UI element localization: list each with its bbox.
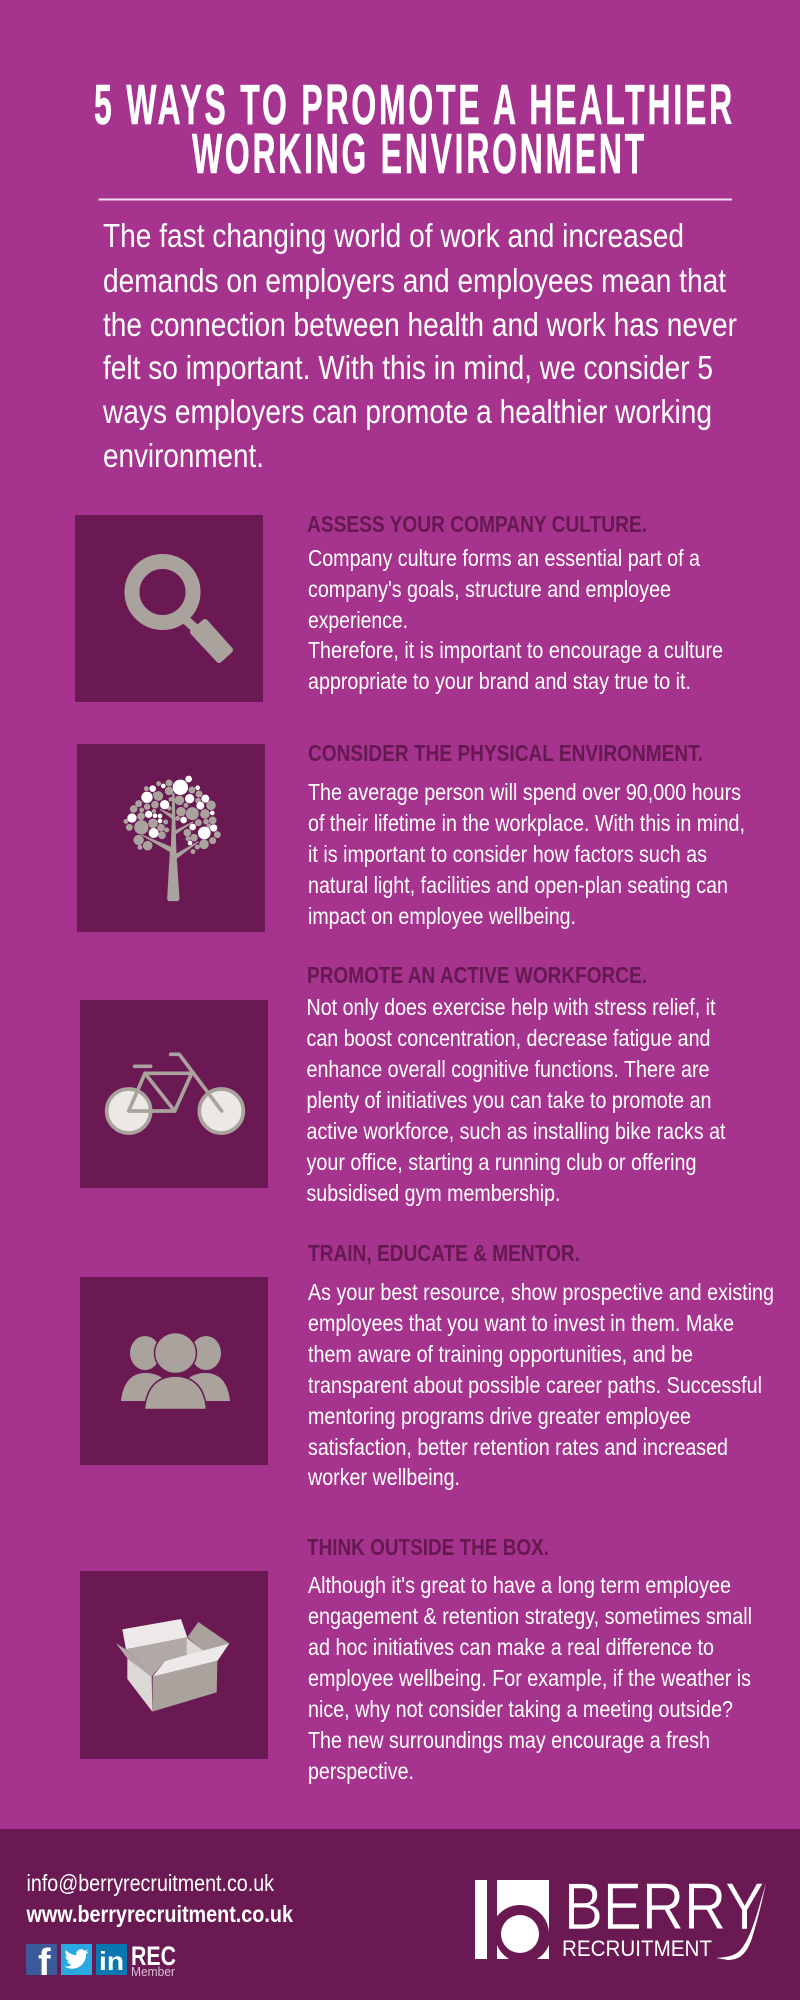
REC member badge: Member [131, 1964, 176, 1979]
body text: it is important to consider how factors such as [308, 841, 707, 867]
body text: enhance overall cognitive functions. There are [306, 1056, 710, 1082]
logo: Berry Recruitment: BERRY [564, 1869, 764, 1943]
body text [308, 545, 723, 694]
body text: perspective. [308, 1758, 414, 1784]
contact details: www.berryrecruitment.co.uk [26, 1901, 293, 1927]
logo: Berry Recruitment: RECRUITMENT [562, 1936, 712, 1961]
contact details [26, 1870, 293, 1927]
intro paragraph [102, 217, 737, 474]
body text: worker wellbeing. [307, 1464, 460, 1490]
body text: active workforce, such as installing bike racks at [306, 1118, 726, 1144]
heading: TRAIN, EDUCATE & MENTOR. [308, 1240, 580, 1266]
body text: them aware of training opportunities, and be [308, 1341, 693, 1367]
REC member badge [131, 1941, 176, 1979]
section 1: assess your company culture [75, 511, 723, 702]
intro paragraph: felt so important. With this in mind, we consider 5 [103, 349, 713, 386]
body text: nice, why not consider taking a meeting outside? [308, 1696, 733, 1722]
icon: linkedin: in [99, 1946, 124, 1976]
intro paragraph: The fast changing world of work and increased [103, 217, 684, 254]
icon panel: bicycle [80, 1000, 268, 1188]
body text: impact on employee wellbeing. [308, 903, 576, 929]
body text: satisfaction, better retention rates and increased [308, 1434, 728, 1460]
icon panel: magnifying glass [75, 515, 263, 702]
body text: Company culture forms an essential part of a [308, 545, 700, 571]
icon: facebook: f [38, 1942, 51, 1984]
body text [306, 994, 726, 1206]
body text [307, 1279, 774, 1490]
body text: employees that you want to invest in them. Make [308, 1310, 734, 1336]
body text [308, 1572, 752, 1784]
body text: Therefore, it is important to encourage a culture [308, 637, 723, 663]
heading: THINK OUTSIDE THE BOX. [307, 1534, 549, 1560]
body text: experience. [308, 607, 408, 633]
icon: twitter [61, 1944, 92, 1975]
body text: Not only does exercise help with stress relief, it [306, 994, 716, 1020]
section 3: promote an active workforce [80, 962, 726, 1206]
body text: subsidised gym membership. [306, 1180, 560, 1206]
body text: can boost concentration, decrease fatigue and [306, 1025, 710, 1051]
body text: appropriate to your brand and stay true to it. [308, 668, 691, 694]
body text: The new surroundings may encourage a fresh [308, 1727, 710, 1753]
icon panel: open box [80, 1571, 268, 1759]
intro paragraph: ways employers can promote a healthier working [102, 393, 712, 430]
body text: company's goals, structure and employee [308, 576, 671, 602]
icon: linkedin [96, 1944, 127, 1976]
section 4: train, educate and mentor [80, 1240, 774, 1490]
body text: mentoring programs drive greater employee [308, 1403, 691, 1429]
contact details: info@berryrecruitment.co.uk [26, 1870, 274, 1896]
heading: CONSIDER THE PHYSICAL ENVIRONMENT. [308, 740, 703, 766]
body text: natural light, facilities and open-plan seating can [308, 872, 728, 898]
footer band [0, 1829, 800, 2000]
heading: ASSESS YOUR COMPANY CULTURE. [307, 511, 647, 537]
body text: Although it's great to have a long term employee [308, 1572, 731, 1598]
heading: PROMOTE AN ACTIVE WORKFORCE. [307, 962, 647, 988]
body text: your office, starting a running club or offering [306, 1149, 696, 1175]
body text: ad hoc initiatives can make a real difference to [308, 1634, 714, 1660]
icon: facebook [26, 1942, 57, 1984]
icon panel: group of people [80, 1277, 268, 1465]
REC member badge: REC [131, 1941, 176, 1971]
section 2: consider the physical environment [77, 740, 745, 932]
body text: The average person will spend over 90,000 hours [308, 779, 741, 805]
icon panel: tree [77, 744, 265, 932]
intro paragraph: environment. [103, 437, 264, 474]
logo: Berry Recruitment [475, 1869, 766, 1961]
section 5: think outside the box [80, 1534, 752, 1784]
body text: plenty of initiatives you can take to promote an [306, 1087, 712, 1113]
body text [308, 779, 745, 929]
title [94, 73, 735, 186]
